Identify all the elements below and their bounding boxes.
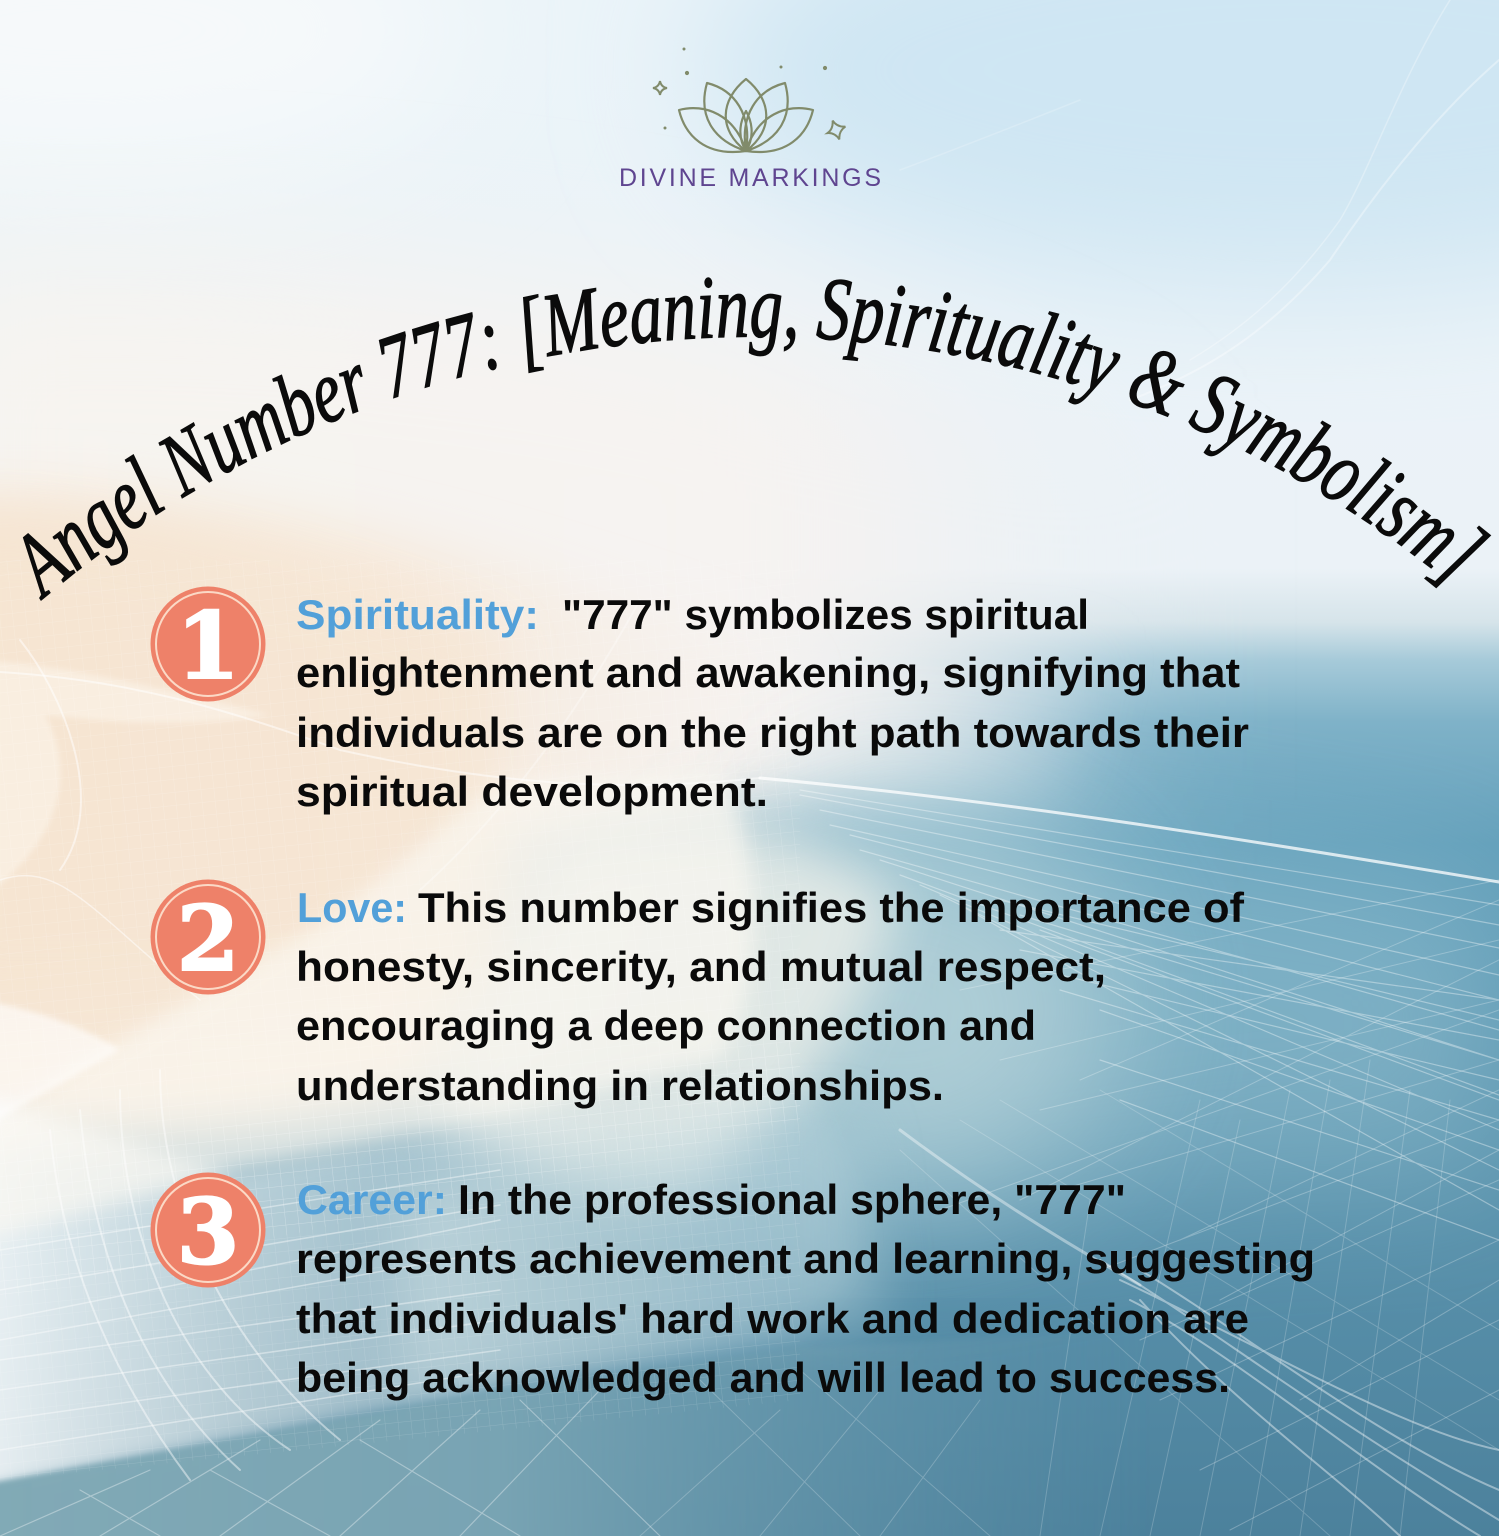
badge 1: [150, 586, 266, 702]
text: Love: understanding in relationships.: [296, 1062, 944, 1109]
white veil: diagonal wedge: [0, 770, 754, 1240]
text: Spirituality: individuals are on the right path towards their: [296, 709, 1249, 756]
item 2: Love: [150, 880, 1245, 1109]
text: Spirituality: "777" symbolizes spiritual: [562, 591, 1089, 638]
text: Career: that individuals' hard work and dedication are: [296, 1295, 1249, 1342]
text: Love: Love:: [297, 884, 407, 931]
item 1: Spirituality: [150, 586, 1249, 815]
icon: lotus: [679, 79, 813, 152]
text: Love: This number signifies the importance of: [418, 884, 1245, 931]
badge 1: 1: [176, 592, 240, 700]
logo: Divine Markings: [619, 48, 881, 192]
text: Spirituality: spiritual development.: [296, 768, 768, 815]
text: Career: represents achievement and learning, suggesting: [296, 1235, 1315, 1282]
badge 3: [150, 1172, 266, 1288]
white veil: left ribbon: [0, 660, 270, 900]
text: Career: In the professional sphere, "777": [458, 1176, 1126, 1223]
text: Career: [296, 1176, 1315, 1401]
text: Love: [296, 884, 1245, 1109]
badge 3: 3: [177, 1179, 239, 1285]
text: Spirituality: Spirituality:: [296, 591, 539, 638]
text: Spirituality: enlightenment and awakening, signifying that: [296, 649, 1240, 696]
item 3: Career: [150, 1172, 1315, 1401]
badge 2: [150, 880, 266, 994]
logo wordmark: DIVINE MARKINGS: [619, 164, 881, 192]
badge 2: 2: [177, 886, 239, 992]
sea tint below the bright strand: [800, 790, 1499, 1240]
title: curved heading: Angel Number 777: [Meaning, Spirituality & Symbolism]: [22, 277, 1492, 601]
text: Spirituality: [296, 591, 1249, 815]
text: Career: being acknowledged and will lead to success.: [296, 1354, 1230, 1401]
text: Love: encouraging a deep connection and: [296, 1002, 1036, 1049]
text: Love: honesty, sincerity, and mutual respect,: [296, 943, 1106, 990]
text: Career: Career:: [297, 1176, 447, 1223]
bottom water: [0, 1330, 1150, 1536]
icon: sparkle stars: [653, 48, 849, 142]
white veil: lower-left sheet: [0, 1060, 880, 1500]
